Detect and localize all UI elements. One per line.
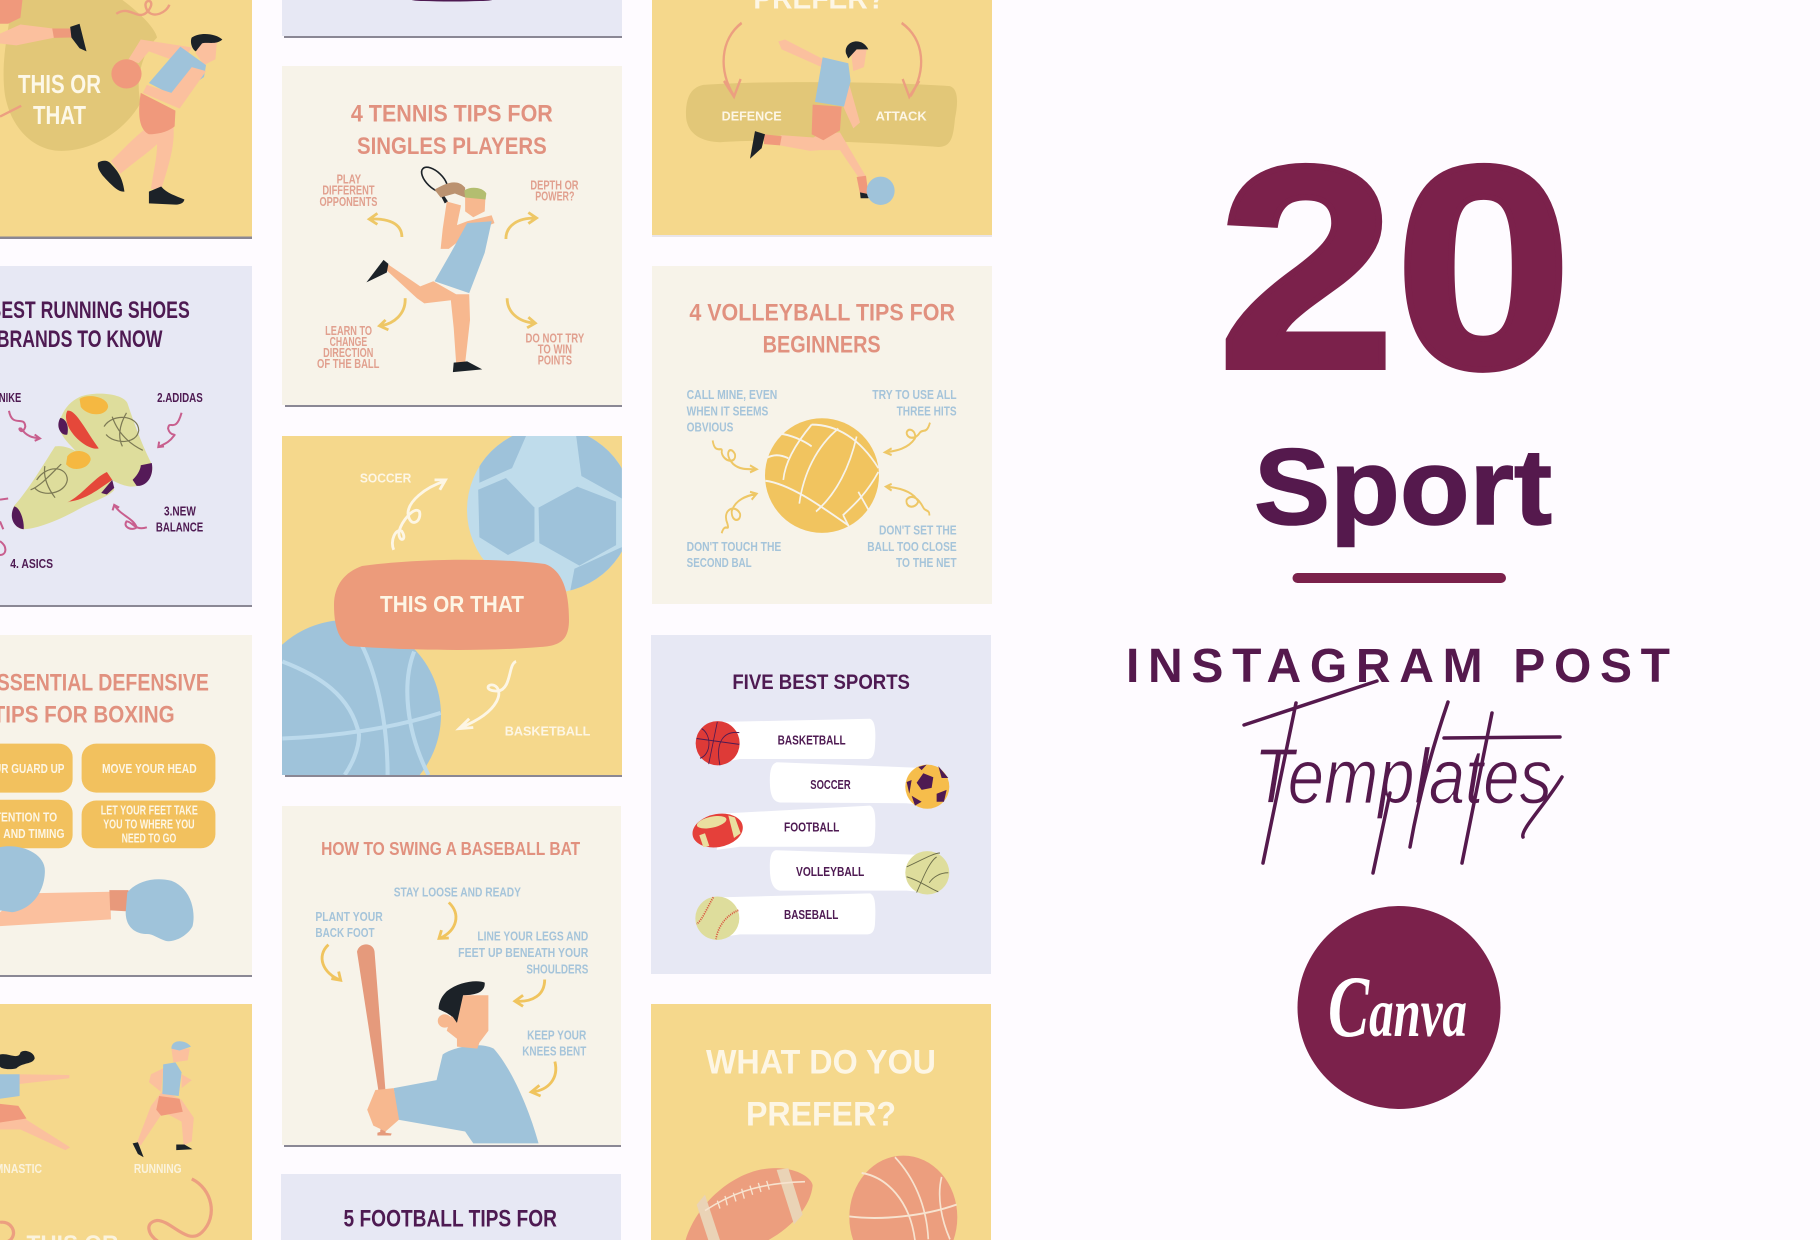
heading: running shoes [0,297,190,353]
heading: running shoes: BRANDS TO KNOW [0,326,163,353]
script heading: templates: Templates [1254,732,1552,820]
panel: defence or attack card [652,0,992,237]
labels: volleyball tips [687,387,957,570]
tip text: YOU TO WHERE YOU [103,817,195,832]
labels: tennis tips: DEPTH OR [530,178,579,193]
tip pills [0,744,215,848]
icon: soccer ball [905,765,949,809]
panel: lavender card top [282,0,622,38]
heading: football tips: 5 FOOTBALL TIPS FOR [344,1206,557,1232]
logo: canva badge: Canva [1328,959,1467,1056]
panel: volleyball tips card [652,266,992,604]
labels: volleyball tips: THREE HITS [897,404,957,419]
labels: volleyball tips: CALL MINE, EVEN [687,387,777,402]
list labels [778,733,864,922]
labels: volleyball tips: TO THE NET [896,555,957,570]
panel: tennis tips card [282,66,622,407]
labels: baseball tips: LINE YOUR LEGS AND [477,929,589,944]
illustration: boxing gloves [0,846,194,941]
labels: tennis tips: DO NOT TRY [526,331,584,345]
labels: baseball tips: STAY LOOSE AND READY [394,885,521,899]
labels: baseball tips: KEEP YOUR [527,1028,587,1042]
button: this or that pill: THIS OR THAT [380,591,524,617]
options text: DEFENCE [722,109,782,124]
heading: this or that: THIS OR [18,69,101,99]
panel: defensive boxing tips card [0,635,252,977]
icon: basketball [849,1156,957,1240]
divider: sport underline [1292,573,1506,583]
labels: baseball tips [315,885,589,1059]
panel: gymnastic vs running card [0,1004,252,1240]
tip text [0,761,198,845]
labels: tennis tips: TO WIN [538,342,572,356]
heading: this or that [18,69,101,130]
illustration: runner [133,1041,194,1157]
labels: volleyball tips: DON'T TOUCH THE [687,539,781,554]
labels: shoe brands: 4. ASICS [10,556,53,571]
labels: baseball tips: SHOULDERS [526,962,588,976]
illustration: batter [357,944,539,1143]
labels: baseball tips: KNEES BENT [522,1044,586,1059]
heading: volleyball: 4 VOLLEYBALL TIPS FOR [689,299,955,326]
list labels: BASEBALL [784,907,838,922]
heading: tennis tips: SINGLES PLAYERS [357,133,547,160]
icon: football [685,1168,813,1240]
panel: what do you prefer card [651,1004,991,1240]
labels: volleyball tips: WHEN IT SEEMS [687,404,768,419]
panel: five best sports card [651,635,991,974]
labels: sports [0,1161,182,1240]
tip text: AND TIMING [3,826,64,841]
labels: tennis tips: LEARN TO [325,323,372,338]
arrows: gold [322,902,556,1096]
title: sport: Sport [1254,426,1552,547]
label: soccer with arrow [360,471,446,550]
illustration: soccer player [750,40,895,205]
arrows: salmon [724,23,921,97]
panel: best running shoes card [0,266,252,607]
illustration: gymnast [0,1051,70,1150]
subtitle: instagram post: INSTAGRAM POST [1126,640,1670,693]
tip text: LET YOUR FEET TAKE [101,803,198,818]
icon: baseball [695,896,739,940]
label: basketball with arrow [459,661,590,739]
heading: volleyball: BEGINNERS [763,331,881,358]
illustration: tennis player [366,163,494,372]
labels: tennis tips: CHANGE [330,334,367,349]
band: options [686,82,957,147]
title: number 20: 20 [1218,107,1572,429]
tip text: MOVE YOUR HEAD [102,761,197,776]
labels: tennis tips: POWER? [535,188,574,203]
labels: tennis tips: OF THE BALL [317,356,379,371]
labels: baseball tips: PLANT YOUR [315,909,383,924]
list labels: SOCCER [810,777,851,792]
icon: volleyball [765,418,879,533]
labels: shoe brands [0,390,203,571]
labels: tennis tips: POINTS [538,353,572,368]
heading: tennis tips [351,101,553,160]
heading: this or that: THAT [33,100,86,130]
icon: basketball [282,620,442,775]
arrows: gold squiggles [713,423,930,533]
arrows: gold curved [369,213,537,330]
options text: ATTACK [876,109,927,124]
options text [722,109,927,124]
labels: sports: RUNNING [134,1161,182,1176]
panel: baseball swing card [282,806,621,1147]
labels: tennis tips: PLAY [337,172,361,187]
labels: baseball tips: BACK FOOT [315,925,375,940]
arrows: pink squiggles [0,411,182,555]
tip text: NEED TO GO [122,831,176,845]
heading: tennis tips: 4 TENNIS TIPS FOR [351,101,553,128]
icon: volleyball [905,851,949,895]
logo: canva badge [1298,906,1500,1109]
label: soccer with arrow: SOCCER [360,471,412,486]
labels: volleyball tips: OBVIOUS [687,419,733,435]
labels: shoe brands: 2.ADIDAS [157,390,203,405]
labels: volleyball tips: TRY TO USE ALL [872,387,957,402]
labels: tennis tips: DIFFERENT [322,183,375,198]
heading: five best sports: FIVE BEST SPORTS [732,671,910,695]
list labels: VOLLEYBALL [796,864,864,879]
label: basketball with arrow: BASKETBALL [505,724,590,739]
button: this or that pill [334,560,569,650]
labels: shoe brands: BALANCE [156,519,203,534]
heading: volleyball [689,299,955,358]
labels: volleyball tips: BALL TOO CLOSE [867,539,957,554]
labels: baseball tips: FEET UP BENEATH YOUR [458,945,589,960]
labels: tennis tips [317,172,584,371]
list labels: FOOTBALL [784,820,839,835]
icon: football [691,810,745,851]
panel: football tips card [281,1174,621,1240]
player dribbling [98,34,222,205]
labels: tennis tips: DIRECTION [323,345,373,360]
script heading: templates [1244,681,1562,873]
panel: soccer or basketball card [282,436,622,777]
heading: baseball: HOW TO SWING A BASEBALL BAT [321,838,581,859]
heading: what do you prefer: PREFER? [746,1095,896,1133]
icon: red basketball [696,721,740,765]
heading: what do you prefer: WHAT DO YOU [706,1043,936,1081]
panel: this or that basketball card [0,0,252,239]
icon: pair of shoes [12,394,152,529]
player kicking leg [0,0,86,51]
heading: boxing tips [0,670,209,729]
labels: volleyball tips: SECOND BAL [687,555,752,570]
labels: shoe brands: 3.NEW [164,504,196,518]
labels: volleyball tips: DON'T SET THE [879,523,957,538]
list pills [717,719,927,937]
list labels: BASKETBALL [778,733,846,748]
heading: what do you prefer [706,1043,936,1133]
labels: tennis tips: OPPONENTS [319,194,378,209]
icon: soccer ball [467,436,622,592]
